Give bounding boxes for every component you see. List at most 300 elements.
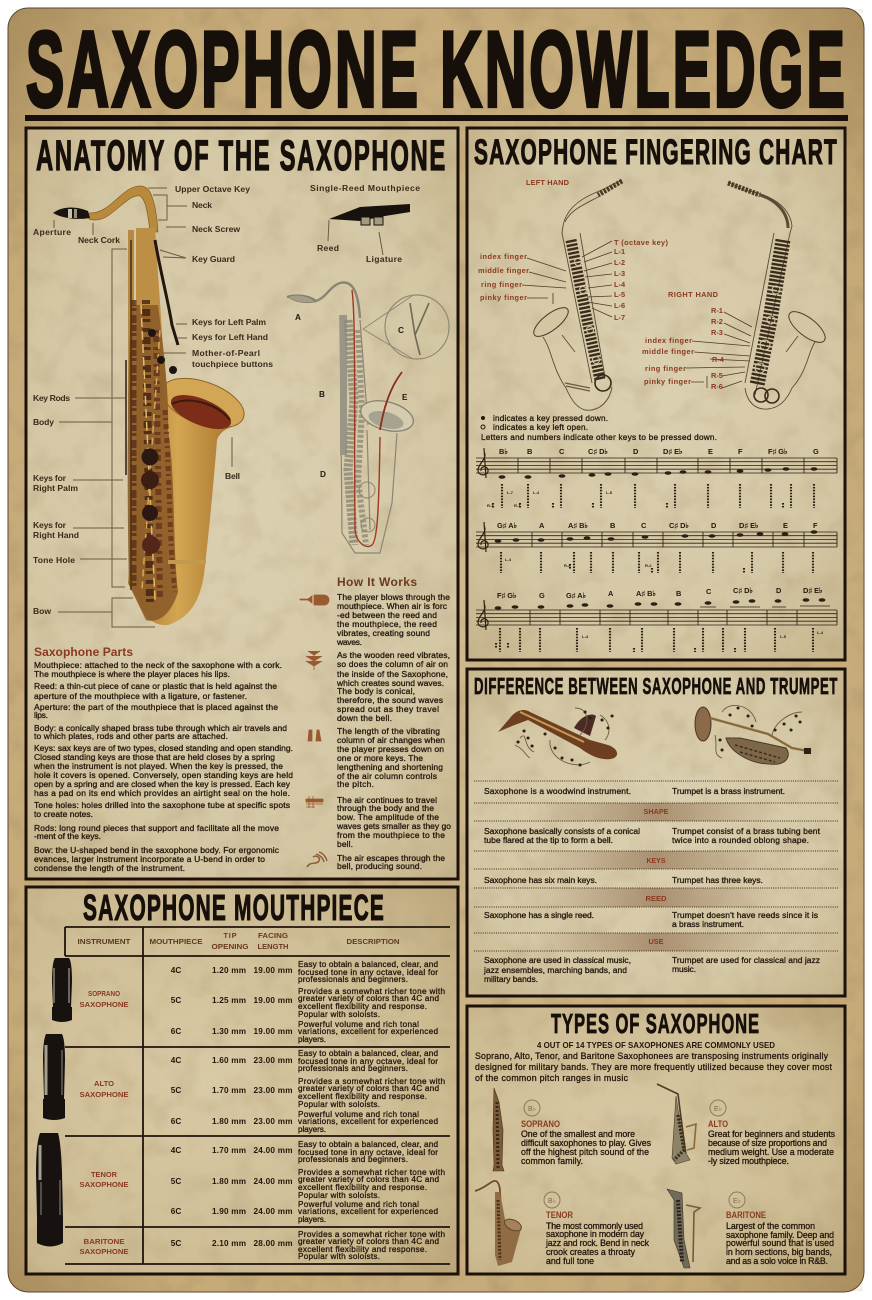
text block: saxophone parts: when the instrument is not played. When the key is pressed, the	[33, 761, 283, 771]
comparison: trumpet column: a brass instrument.	[672, 919, 744, 929]
table header row: LENGTH	[258, 942, 288, 951]
row group: alto: 6C	[171, 1117, 181, 1126]
row group: alto: 1.60 mm	[212, 1056, 246, 1065]
comparison: saxophone column	[483, 786, 640, 984]
fingering legend: indicates a key left open.	[493, 423, 588, 432]
comparison: trumpet column: twice into a rounded oblong shape.	[672, 835, 809, 845]
single-reed mouthpiece illustration: Single-Reed Mouthpiece	[310, 183, 420, 193]
table rules	[65, 927, 450, 1264]
row group: alto: 23.00 mm	[254, 1117, 292, 1126]
row group: soprano: 1.25 mm	[212, 996, 246, 1005]
icon: mouthpiece air	[300, 595, 329, 605]
music staff row 1: G	[813, 447, 819, 456]
diagram: saxophone air flow: E	[402, 393, 408, 402]
music staff row 1: R-1	[487, 503, 494, 508]
row group: tenor: variations, excellent for experienced	[298, 1207, 438, 1216]
type: tenor: jazz and rock. Bend in neck	[545, 1238, 650, 1248]
music staff row 1: F♯ G♭	[768, 447, 788, 456]
text block: how it works: As the wooden reed vibrates,	[337, 650, 450, 660]
diagram: saxophone air flow: D	[320, 470, 326, 479]
table header row: TIP	[224, 931, 237, 940]
text block: saxophone parts: to which plates, rods and other parts are attached.	[34, 731, 228, 741]
text block: how it works: The player blows through the	[337, 592, 450, 602]
text block: saxophone parts: Closed standing keys are those that are held closes by a spring	[34, 752, 275, 762]
row group: alto: variations, excellent for experienced	[298, 1117, 438, 1126]
row group: soprano: SAXOPHONE	[80, 1000, 129, 1009]
type: alto: medium weight. Use a moderate	[708, 1147, 834, 1157]
text block: how it works: so does the column of air on	[337, 659, 448, 669]
finger labels: ring finger	[481, 280, 522, 289]
row group: tenor: focused tone in any octave, ideal for	[298, 1148, 438, 1157]
text block: how it works: The body is conical,	[337, 686, 415, 696]
anatomy part labels: Mother-of-Pearl	[192, 348, 260, 358]
music staff row 2: G♯ A♭	[497, 521, 517, 530]
type: baritone: E♭	[733, 1197, 741, 1205]
illustration: soprano saxophone	[493, 1088, 504, 1171]
illustration: alto saxophone	[657, 1084, 696, 1164]
panel: saxophone fingering chart	[467, 128, 845, 660]
finger labels: L-6	[614, 301, 625, 310]
icon: body and bow waves	[306, 796, 323, 808]
icon: bell sound	[307, 852, 327, 867]
fingering legend: indicates a key pressed down.	[493, 414, 608, 423]
row group: alto: ALTO	[94, 1079, 114, 1088]
text block: how it works: waves.	[336, 637, 362, 647]
row group: soprano: greater variety of colors than 4C and	[298, 994, 439, 1003]
text block: how it works: lengthening and shortening	[337, 762, 443, 772]
text block: how it works: one or more keys. The	[337, 753, 423, 763]
text block: how it works	[336, 575, 451, 871]
single-reed mouthpiece illustration: Reed	[317, 243, 339, 253]
text block: how it works: The air continues to travel	[337, 795, 437, 805]
text block: how it works: vibrates, creating sound	[337, 628, 430, 638]
type: soprano: common family.	[521, 1156, 583, 1166]
anatomy part labels: Key Rods	[33, 393, 70, 403]
row group: soprano: 1.30 mm	[212, 1027, 246, 1036]
text block: saxophone parts: hole it covers is opened. Conversely, open standing keys are held	[34, 770, 293, 780]
anatomy part labels: Bell	[225, 471, 240, 481]
text block: how it works: the inside of the Saxophone,	[337, 669, 448, 679]
text block: how it works: the mouthpiece, the reed	[337, 619, 437, 629]
heading: mouthpiece: SAXOPHONE MOUTHPIECE	[83, 887, 385, 928]
anatomy part labels: Keys for Left Palm	[192, 317, 266, 327]
row group: soprano: 19.00 mm	[254, 996, 292, 1005]
anatomy part labels: Right Palm	[33, 483, 78, 493]
music staff row 1: L-4	[533, 490, 540, 495]
text block: saxophone parts: -ment of the keys.	[34, 831, 101, 841]
anatomy part labels: Neck	[192, 200, 212, 210]
illustration: gold tenor saxophone	[53, 186, 251, 625]
text block: how it works: bell, producing sound.	[337, 861, 422, 871]
illustration: baritone saxophone	[667, 1189, 700, 1268]
finger labels: pinky finger	[480, 293, 527, 302]
type: soprano: off the highest pitch sound of the	[521, 1147, 649, 1157]
row group: alto: SAXOPHONE	[80, 1090, 129, 1099]
music staff row 1: D♯ E♭	[663, 447, 683, 456]
type: soprano: B♭	[528, 1105, 536, 1113]
text block: how it works: mouthpiece. When air is forc	[337, 601, 448, 611]
type: soprano: One of the smallest and more	[521, 1129, 635, 1139]
music staff row 1: L-5	[606, 490, 613, 495]
finger labels: L-2	[614, 258, 625, 267]
anatomy part labels: Keys for	[33, 520, 67, 530]
row group: alto: greater variety of colors than 4C and	[298, 1084, 439, 1093]
music staff row 1: B♭	[499, 447, 508, 456]
music staff row 1: B	[527, 447, 532, 456]
row group: alto: Easy to obtain a balanced, clear, and	[298, 1049, 438, 1058]
text block: how it works: How It Works	[337, 575, 417, 589]
row group: baritone: Provides a somewhat richer tone with	[298, 1230, 445, 1239]
finger labels: R-5	[711, 371, 723, 380]
comparison labels: KEYS	[646, 856, 666, 865]
comparison: saxophone column: jazz ensembles, marching bands, and	[483, 965, 627, 975]
anatomy part labels: Aperture	[33, 227, 71, 237]
row group: soprano: Powerful volume and rich tonal	[298, 1020, 419, 1029]
table header row: INSTRUMENT	[78, 937, 131, 946]
types introduction: of the common pitch ranges in music	[475, 1073, 629, 1083]
text block: saxophone parts: Saxophone Parts	[34, 645, 133, 659]
diagram: saxophone air flow: A	[295, 313, 301, 322]
text block: how it works: The length of the vibrating	[337, 726, 440, 736]
row group: tenor: 1.90 mm	[212, 1207, 246, 1216]
row group: baritone: greater variety of colors than 4C and	[298, 1237, 439, 1246]
music staff row 2: D♯ E♭	[739, 521, 759, 530]
music staff row 2	[476, 521, 837, 573]
illustration: tenor saxophone	[475, 1181, 523, 1266]
finger labels: T (octave key)	[614, 238, 669, 247]
music staff row 2: B	[610, 521, 615, 530]
finger labels: L-1	[614, 247, 625, 256]
type: baritone: and as a solo voice in R&B.	[726, 1256, 828, 1266]
row group: soprano: SOPRANO	[88, 989, 120, 998]
music staff row 3: C♯ D♭	[733, 586, 753, 595]
comparison: trumpet column: Trumpet has three keys.	[672, 875, 763, 885]
anatomy part labels: Neck Screw	[192, 224, 240, 234]
type: tenor: crook creates a throaty	[546, 1247, 636, 1257]
types introduction: Soprano, Alto, Tenor, and Baritone Saxophonees are transposing instruments originally	[475, 1051, 829, 1061]
finger labels: L-7	[614, 313, 625, 322]
music staff row 1: R-1	[514, 503, 521, 508]
row group: tenor: greater variety of colors than 4C and	[298, 1175, 439, 1184]
type: baritone: Largest of the common	[726, 1221, 815, 1231]
type: tenor: and full tone	[546, 1256, 594, 1266]
text block: saxophone parts: condense the length of the instrument.	[34, 863, 185, 873]
music staff row 3: G	[539, 591, 545, 600]
type: baritone	[726, 1192, 834, 1266]
music staff row 1: D	[633, 447, 639, 456]
row group: baritone: excellent flexibility and response.	[298, 1245, 427, 1254]
text block: how it works: bell.	[337, 839, 353, 849]
row group: alto: 5C	[171, 1086, 181, 1095]
row group: alto: 23.00 mm	[254, 1056, 292, 1065]
music staff row 3: L-4	[817, 630, 824, 635]
anatomy part labels: Keys for Left Hand	[192, 332, 268, 342]
finger labels: LEFT HAND	[526, 178, 570, 187]
music staff row 2: C	[641, 521, 647, 530]
music staff row 2: D	[711, 521, 717, 530]
music staff row 1: F	[738, 447, 743, 456]
row group: tenor: professionals and beginners.	[298, 1155, 408, 1164]
row group: tenor: SAXOPHONE	[80, 1180, 129, 1189]
text block: saxophone parts: has a pad on its end which provides an airtight seal on the hole.	[34, 788, 290, 798]
row group: tenor: Provides a somewhat richer tone with	[298, 1168, 445, 1177]
comparison band: keys	[534, 851, 778, 869]
finger labels: R-4	[712, 355, 725, 364]
panel: anatomy of the saxophone	[26, 128, 458, 879]
row group: tenor: 1.80 mm	[212, 1177, 246, 1186]
anatomy leader lines	[54, 188, 232, 627]
text block: saxophone parts: lips.	[34, 710, 48, 720]
row group: tenor: Easy to obtain a balanced, clear, and	[298, 1140, 438, 1149]
type: baritone: BARITONE	[726, 1210, 766, 1220]
row group: alto: focused tone in any octave, ideal for	[298, 1057, 438, 1066]
row group: alto: players.	[298, 1125, 326, 1134]
comparison band: use	[534, 933, 778, 951]
music staff row 1: C	[559, 447, 565, 456]
music staff row 3: C	[706, 587, 712, 596]
diagram: left hand saxophone	[530, 180, 622, 410]
comparison: saxophone column: Saxophone is a woodwind instrument.	[484, 786, 631, 796]
mouthpiece image: tenor	[36, 1133, 63, 1246]
text block: saxophone parts: Aperture: the part of the mouthpiece that is placed against the	[34, 702, 278, 712]
music staff row 1: L-7	[507, 490, 514, 495]
comparison: saxophone column: Saxophone are used in classical music,	[484, 955, 631, 965]
type: baritone: in horn sections, big bands,	[726, 1247, 832, 1257]
comparison labels: USE	[648, 937, 664, 946]
row group: baritone: 5C	[171, 1239, 181, 1248]
row group: alto: 1.70 mm	[212, 1086, 246, 1095]
mouthpiece image: alto	[43, 1034, 65, 1120]
music staff row 3: D♯ E♭	[803, 586, 823, 595]
text block: saxophone parts: to create notes.	[34, 809, 93, 819]
heading: anatomy: ANATOMY OF THE SAXOPHONE	[36, 132, 447, 180]
fingering legend: Letters and numbers indicate other keys to be pressed down.	[481, 433, 717, 442]
text block: how it works: the player presses down on	[337, 744, 444, 754]
text block: how it works: down the bell.	[337, 713, 392, 723]
comparison: trumpet column: Trumpet is a brass instrument.	[672, 786, 785, 796]
panel: types of saxophone	[467, 1006, 845, 1274]
row group: tenor: players.	[298, 1215, 326, 1224]
row group: soprano: variations, excellent for experienced	[298, 1027, 438, 1036]
row group: alto: 4C	[171, 1056, 181, 1065]
music staff row 2: C♯ D♭	[669, 521, 689, 530]
text block: how it works: The air escapes through the	[337, 853, 445, 863]
row group: tenor	[80, 1140, 445, 1224]
text block: how it works: from the mouthpiece to the	[337, 830, 445, 840]
text block: saxophone parts: aperture of the mouthpiece with a ligature, or fastener.	[34, 691, 247, 701]
row group: tenor: TENOR	[91, 1170, 118, 1179]
music staff row 3: B	[676, 589, 681, 598]
text block: how it works: waves gets smaller as they go	[336, 821, 451, 831]
anatomy part labels	[33, 184, 273, 616]
type: alto: E♭	[714, 1105, 722, 1113]
text block: how it works: which creates sound waves.	[336, 678, 444, 688]
type: alto: because of size proportions and	[708, 1138, 827, 1148]
row group: tenor: 4C	[171, 1146, 181, 1155]
row group: alto: 1.80 mm	[212, 1117, 246, 1126]
music staff row 3: D	[776, 586, 782, 595]
comparison: trumpet column: Trumpet doesn't have reeds since it is	[672, 910, 818, 920]
icon: air column	[308, 730, 321, 741]
type: alto: Great for beginners and students	[708, 1129, 836, 1139]
comparison band: reed	[534, 888, 778, 907]
comparison: trumpet column: Trumpet are used for classical and jazz	[672, 955, 820, 965]
row group: alto: professionals and beginners.	[298, 1064, 408, 1073]
row group: baritone: SAXOPHONE	[80, 1247, 129, 1256]
anatomy part labels: Key Guard	[192, 254, 235, 264]
row group: baritone: 28.00 mm	[254, 1239, 292, 1248]
type: alto: -ly sized mouthpiece.	[708, 1156, 789, 1166]
row group: soprano: 6C	[171, 1027, 181, 1036]
comparison: trumpet column	[672, 786, 821, 974]
finger labels: L-3	[614, 269, 625, 278]
row group: tenor: 24.00 mm	[254, 1146, 292, 1155]
anatomy part labels: Keys for	[33, 473, 67, 483]
row group: soprano: Popular with soloists.	[298, 1010, 380, 1019]
fingering legend	[481, 414, 717, 442]
row group: soprano: excellent flexibility and response.	[298, 1002, 427, 1011]
type: tenor: saxophone in modern day	[546, 1229, 645, 1239]
type: soprano	[521, 1100, 652, 1166]
icon: reed vibration	[306, 651, 322, 670]
row group: alto: Powerful volume and rich tonal	[298, 1110, 419, 1119]
row group: baritone: 2.10 mm	[212, 1239, 246, 1248]
comparison: saxophone column: military bands.	[484, 974, 538, 984]
music staff row 1: C♯ D♭	[588, 447, 608, 456]
comparison: saxophone column: tube flared at the tip to form a bell.	[484, 835, 613, 845]
text block: how it works: spread out as they travel	[337, 704, 439, 714]
row group: soprano: players.	[298, 1035, 326, 1044]
row group: tenor: 24.00 mm	[254, 1207, 292, 1216]
mouthpiece image: soprano	[52, 958, 72, 1022]
music staff row 2: A	[539, 521, 545, 530]
diagram: saxophone air flow: C	[398, 326, 404, 335]
row group: soprano: focused tone in any octave, ideal for	[298, 968, 438, 977]
text block: saxophone parts: open by a spring and are closed when the key is pressed. Each key	[34, 779, 291, 789]
row group: tenor: excellent flexibility and response.	[298, 1183, 427, 1192]
text block: saxophone parts: The mouthpiece is where the player places his lips.	[34, 669, 230, 679]
row group: alto: Provides a somewhat richer tone with	[298, 1077, 445, 1086]
text block: saxophone parts: evances, larger instrument incorporate a U-bend in order to	[34, 854, 265, 864]
anatomy part labels: Right Hand	[33, 530, 79, 540]
music staff row 3: A♯ B♭	[636, 589, 656, 598]
row group: soprano	[80, 960, 445, 1044]
row group: alto: Popular with soloists.	[298, 1100, 380, 1109]
table header row: OPENING	[212, 942, 249, 951]
text block: how it works: therefore, the sound waves	[337, 695, 443, 705]
table header row: DESCRIPTION	[346, 937, 400, 946]
finger labels: R-2	[711, 317, 723, 326]
text block: how it works: column of air changes when	[337, 735, 445, 745]
single-reed mouthpiece illustration	[310, 183, 420, 264]
finger labels: RIGHT HAND	[668, 290, 719, 299]
type: tenor: TENOR	[546, 1210, 574, 1220]
row group: soprano: Easy to obtain a balanced, clear, and	[298, 960, 438, 969]
text block: saxophone parts: Keys: sax keys are of two types, closed standing and open standing.	[34, 743, 293, 753]
row group: soprano: 4C	[171, 966, 181, 975]
music staff row 2: R-2	[564, 563, 571, 568]
row group: baritone	[80, 1230, 445, 1261]
diagram: saxophone air flow	[287, 282, 449, 553]
row group: alto: excellent flexibility and response.	[298, 1092, 427, 1101]
type: alto	[708, 1100, 836, 1166]
finger labels: index finger	[645, 336, 692, 345]
text block: saxophone parts: Bow: the U-shaped bend in the saxophone body. For ergonomic	[34, 845, 280, 855]
illustration: trumpet with music notes	[695, 705, 811, 764]
text block: how it works: bow. The amplitude of the	[337, 812, 439, 822]
comparison labels: SHAPE	[644, 807, 669, 816]
comparison: saxophone column: Saxophone basically consists of a conical	[484, 826, 640, 836]
type: baritone: powerful sound that is used	[726, 1238, 834, 1248]
comparison: trumpet column: music.	[672, 964, 696, 974]
finger labels: index finger	[480, 252, 527, 261]
panel: saxophone mouthpiece	[26, 887, 458, 1274]
row group: tenor: 5C	[171, 1177, 181, 1186]
row group: soprano: 1.20 mm	[212, 966, 246, 975]
diagram: right hand saxophone	[728, 182, 830, 409]
music staff row 3: F♯ G♭	[497, 591, 516, 600]
row group: tenor: Powerful volume and rich tonal	[298, 1200, 419, 1209]
row group: soprano: Provides a somewhat richer tone with	[298, 987, 445, 996]
anatomy part labels: Neck Cork	[78, 235, 120, 245]
text block: how it works: -ed between the reed and	[337, 610, 437, 620]
types introduction: 4 OUT OF 14 TYPES OF SAXOPHONES ARE COMMONLY USED	[537, 1041, 775, 1050]
text block: saxophone parts: Body: a conically shaped brass tube through which air travels and	[34, 723, 287, 733]
type: tenor	[544, 1192, 650, 1266]
finger labels: pinky finger	[644, 377, 691, 386]
music staff row 3	[476, 586, 837, 652]
type: baritone: saxophone family. Deep and	[726, 1230, 834, 1240]
row group: soprano: 19.00 mm	[254, 1027, 292, 1036]
row group: tenor: 6C	[171, 1207, 181, 1216]
row group: soprano: 19.00 mm	[254, 966, 292, 975]
finger labels: middle finger	[478, 266, 529, 275]
text block: how it works: the pitch.	[337, 779, 374, 789]
table header row	[78, 931, 400, 951]
music staff row 2: A♯ B♭	[568, 521, 588, 530]
music staff row 2: F	[813, 521, 818, 530]
music staff row 2: L-4	[505, 557, 512, 562]
row group: baritone: Popular with soloists.	[298, 1252, 380, 1261]
anatomy part labels: touchpiece buttons	[192, 359, 273, 369]
anatomy part labels: Bow	[33, 606, 51, 616]
finger labels: R-6	[711, 382, 723, 391]
music staff row 2: E	[783, 521, 788, 530]
comparison: saxophone column: Saxophone has a single reed.	[484, 910, 594, 920]
row group: tenor: Popular with soloists.	[298, 1191, 380, 1200]
types introduction	[475, 1041, 833, 1083]
anatomy part labels: Body	[33, 417, 54, 427]
text block: saxophone parts: Rods: long round pieces that support and facilitate all the move	[34, 823, 279, 833]
row group: alto	[80, 1049, 445, 1134]
finger labels: R-3	[711, 328, 723, 337]
music staff row 1: E	[708, 447, 713, 456]
finger labels: L-5	[614, 290, 625, 299]
row group: tenor: 24.00 mm	[254, 1177, 292, 1186]
row group: soprano: professionals and beginners.	[298, 975, 408, 984]
finger labels: R-1	[711, 306, 723, 315]
music staff row 2: R-2	[645, 563, 652, 568]
text block: how it works: through the body and the	[337, 803, 434, 813]
music staff row 3: A	[608, 589, 614, 598]
row group: baritone: BARITONE	[84, 1237, 125, 1246]
types introduction: designed for military bands. They are more frequently utilized because they cover most	[475, 1062, 833, 1072]
row group: alto: 23.00 mm	[254, 1086, 292, 1095]
comparison: saxophone column: Saxophone has six main keys.	[484, 875, 597, 885]
music staff row 3: L-4	[582, 634, 589, 639]
table header row: MOUTHPIECE	[150, 937, 203, 946]
anatomy part labels: Upper Octave Key	[175, 184, 250, 194]
